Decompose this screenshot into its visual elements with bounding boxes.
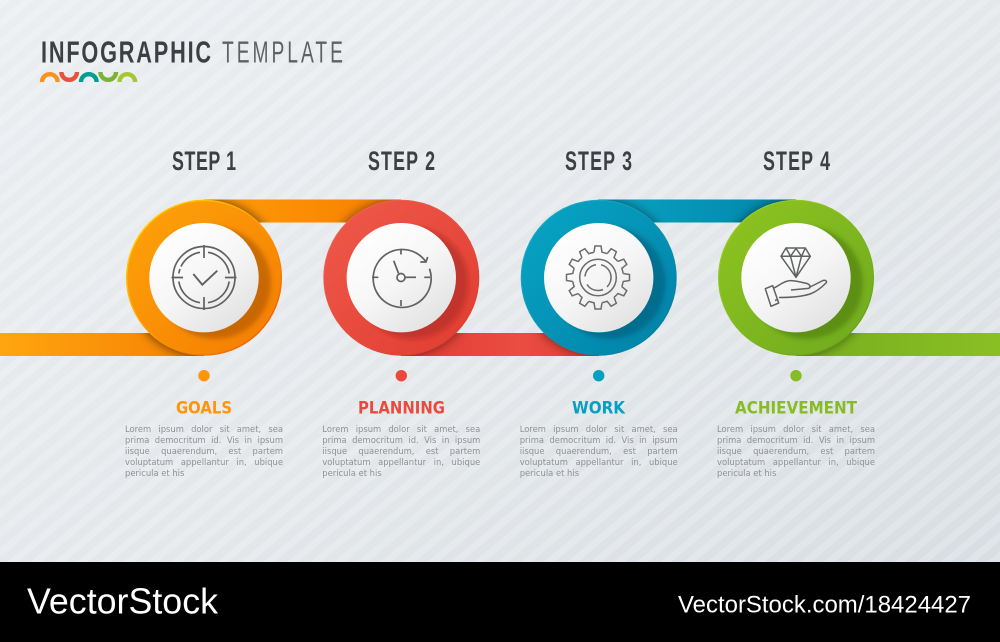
step headings: STEP 4 bbox=[763, 145, 830, 176]
icon: diamond over hand bbox=[765, 248, 827, 306]
text block: work: Lorem ipsum dolor sit amet, sea bbox=[520, 424, 678, 434]
footer bar bbox=[0, 562, 1000, 642]
step 4 circle bbox=[717, 199, 875, 357]
text block: goals: voluptatum appellantur in, ubique bbox=[125, 456, 283, 466]
text block: work bbox=[520, 424, 678, 478]
title: TEMPLATE bbox=[222, 36, 343, 70]
icon: target with check bbox=[172, 245, 236, 310]
step headings: STEP 2 bbox=[368, 145, 435, 176]
text block: achievement: pericula et his bbox=[717, 468, 776, 478]
text block: planning: prima democritum id. Vis in ipsum bbox=[322, 434, 480, 444]
text block: goals: iisque quaerendum, est partem bbox=[125, 446, 283, 456]
text block: work: pericula et his bbox=[520, 468, 579, 478]
title bbox=[41, 35, 343, 70]
bullet dots bbox=[198, 370, 802, 381]
connecting ribbons bbox=[0, 200, 1000, 356]
footer logo: VectorStock bbox=[27, 580, 219, 622]
text block: planning: Lorem ipsum dolor sit amet, sea bbox=[322, 424, 480, 434]
step 2 circle bbox=[322, 199, 480, 357]
text block: achievement: prima democritum id. Vis in ipsum bbox=[717, 434, 875, 444]
text block: goals: prima democritum id. Vis in ipsum bbox=[125, 434, 283, 444]
text block: work: iisque quaerendum, est partem bbox=[520, 446, 678, 456]
step headings bbox=[172, 145, 830, 176]
step headings: STEP 3 bbox=[565, 145, 632, 176]
step labels: PLANNING bbox=[358, 398, 445, 418]
text block: achievement: iisque quaerendum, est partem bbox=[717, 446, 875, 456]
step 1 circle bbox=[125, 199, 283, 357]
text block: goals: pericula et his bbox=[125, 468, 184, 478]
text block: goals bbox=[125, 424, 283, 478]
text block: planning: pericula et his bbox=[322, 468, 382, 478]
text block: planning: voluptatum appellantur in, ubique bbox=[322, 456, 480, 466]
step 3 circle bbox=[520, 199, 678, 357]
step labels: ACHIEVEMENT bbox=[735, 398, 857, 418]
text block: planning: iisque quaerendum, est partem bbox=[322, 446, 480, 456]
footer url: VectorStock.com/18424427 bbox=[678, 592, 971, 618]
text block: achievement: voluptatum appellantur in, ubique bbox=[717, 456, 875, 466]
logo squiggle bbox=[42, 72, 135, 82]
step headings: STEP 1 bbox=[172, 145, 236, 176]
step labels bbox=[176, 398, 857, 418]
text block: planning bbox=[322, 424, 480, 478]
text block: achievement: Lorem ipsum dolor sit amet, sea bbox=[717, 424, 875, 434]
text block: goals: Lorem ipsum dolor sit amet, sea bbox=[125, 424, 283, 434]
step labels: GOALS bbox=[176, 398, 232, 418]
text block: work: voluptatum appellantur in, ubique bbox=[520, 456, 678, 466]
icon: gear bbox=[566, 246, 630, 309]
title: INFOGRAPHIC bbox=[41, 35, 211, 69]
text block: achievement bbox=[717, 424, 875, 478]
icon: clock with arrow bbox=[372, 249, 431, 307]
step labels: WORK bbox=[572, 398, 626, 418]
text block: work: prima democritum id. Vis in ipsum bbox=[520, 434, 678, 444]
